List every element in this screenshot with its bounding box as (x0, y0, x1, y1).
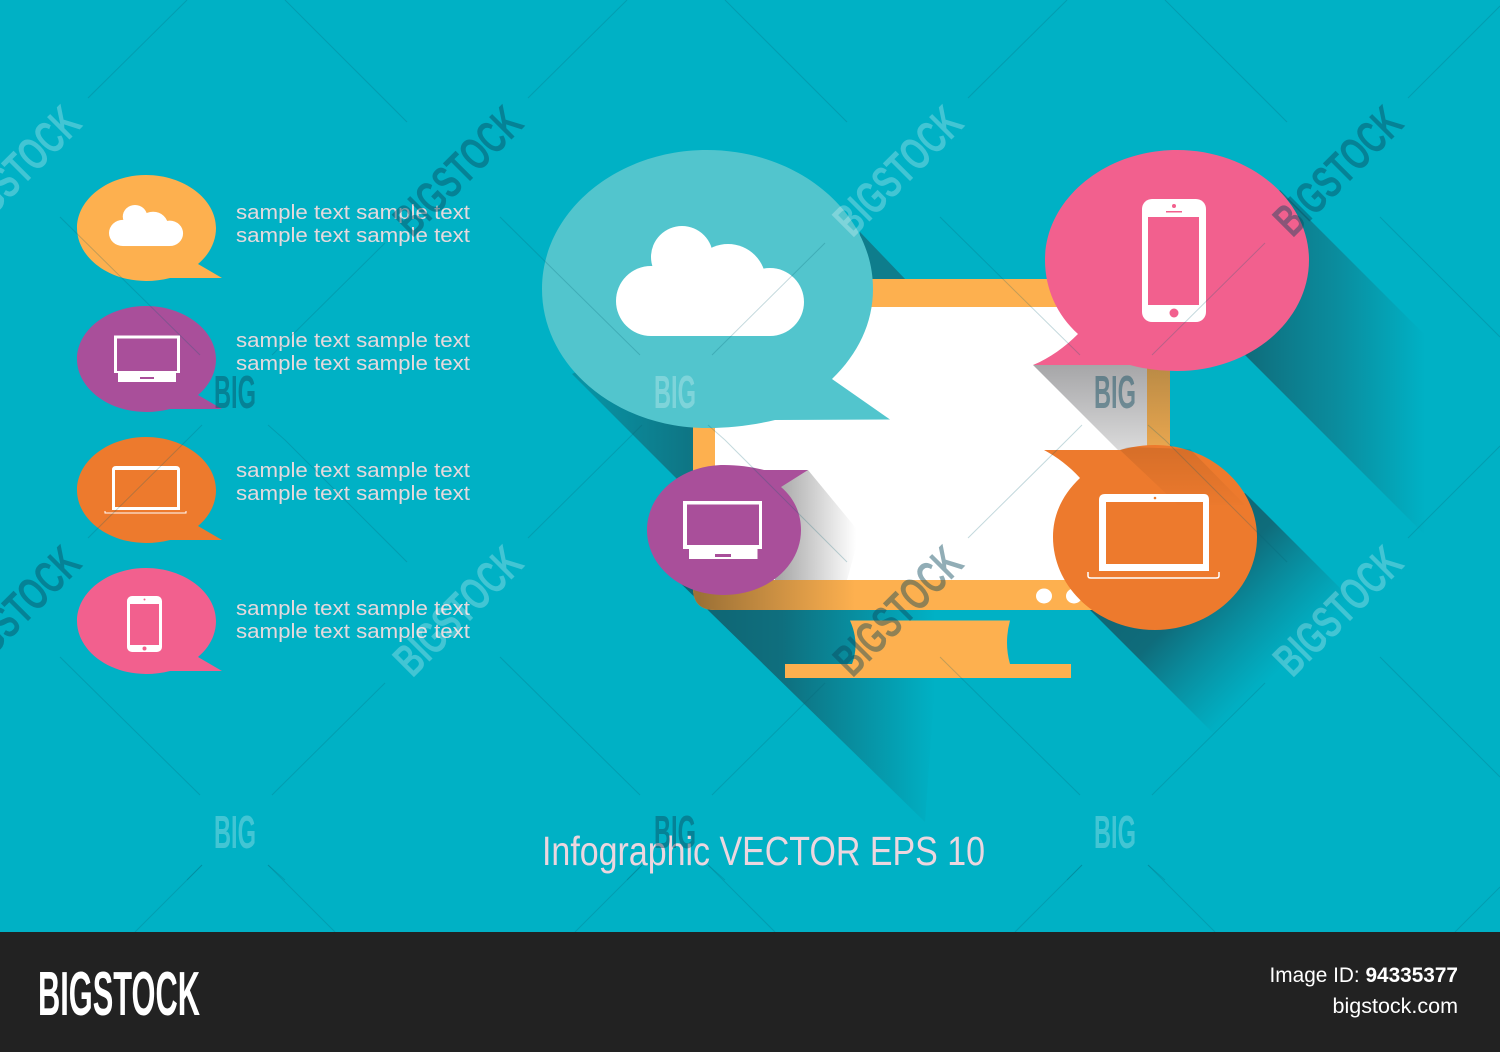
watermark text (0, 96, 1413, 858)
speech bubble: laptop (1044, 445, 1257, 630)
watermark text: BIGSTOCK (383, 536, 533, 686)
icon: phone small (127, 596, 162, 652)
icon: cloud small (109, 205, 183, 246)
text block 3: sample text sample text (236, 483, 470, 505)
text block 4: sample text sample text (236, 621, 470, 643)
long shadows (572, 190, 1470, 822)
list item 4 (77, 568, 470, 674)
speech bubble: monitor (647, 465, 808, 595)
watermark text: BIGSTOCK (823, 536, 973, 686)
monitor screen (715, 307, 1147, 580)
icon: laptop (1088, 494, 1219, 578)
small bubble: cloud (77, 175, 222, 281)
list item 1 (77, 175, 470, 281)
text block 4: sample text sample text (236, 598, 470, 620)
text block 2: sample text sample text (236, 353, 470, 375)
watermark text: BIG (214, 806, 256, 858)
shadow on laptop bubble (1120, 447, 1245, 505)
list item 3 (77, 437, 470, 543)
text block 3: sample text sample text (236, 460, 470, 482)
shadow on screen from purple bubble (693, 470, 860, 610)
watermark text: BIGSTOCK (1263, 96, 1413, 246)
footer bar (0, 932, 1500, 1052)
footer url: bigstock.com (1333, 994, 1458, 1018)
watermark text: BIG (1094, 806, 1136, 858)
monitor (693, 279, 1170, 678)
monitor stand (785, 620, 1071, 678)
icon: laptop small (105, 466, 186, 513)
icon: phone (1142, 199, 1206, 322)
icon: monitor (683, 501, 762, 559)
watermark text: BIG (214, 366, 256, 418)
speech bubble: phone (1033, 150, 1309, 371)
list item 2 (77, 306, 470, 412)
footer bar: BIGSTOCK (38, 960, 200, 1029)
watermark text: BIGSTOCK (1263, 536, 1413, 686)
speech bubble: cloud (542, 150, 890, 428)
icon: cloud (616, 226, 804, 336)
watermark text: BIG (1094, 366, 1136, 418)
small bubble: laptop (77, 437, 222, 543)
image id: Image ID: 94335377 (1270, 964, 1458, 987)
small bubble: phone (77, 568, 222, 674)
watermark text: BIGSTOCK (823, 96, 973, 246)
shadow on screen from pink bubble (1033, 365, 1170, 480)
monitor frame (693, 279, 1170, 610)
text block 1: sample text sample text (236, 225, 470, 247)
title: Infographic VECTOR EPS 10 (542, 828, 985, 874)
small bubble: monitor (77, 306, 222, 412)
watermark text: BIGSTOCK (383, 96, 533, 246)
text block 1: sample text sample text (236, 202, 470, 224)
monitor buttons (1036, 588, 1082, 604)
watermark text: BIG (654, 366, 696, 418)
text block 2: sample text sample text (236, 330, 470, 352)
icon: monitor small (114, 336, 180, 382)
watermark text: BIG (654, 806, 696, 858)
